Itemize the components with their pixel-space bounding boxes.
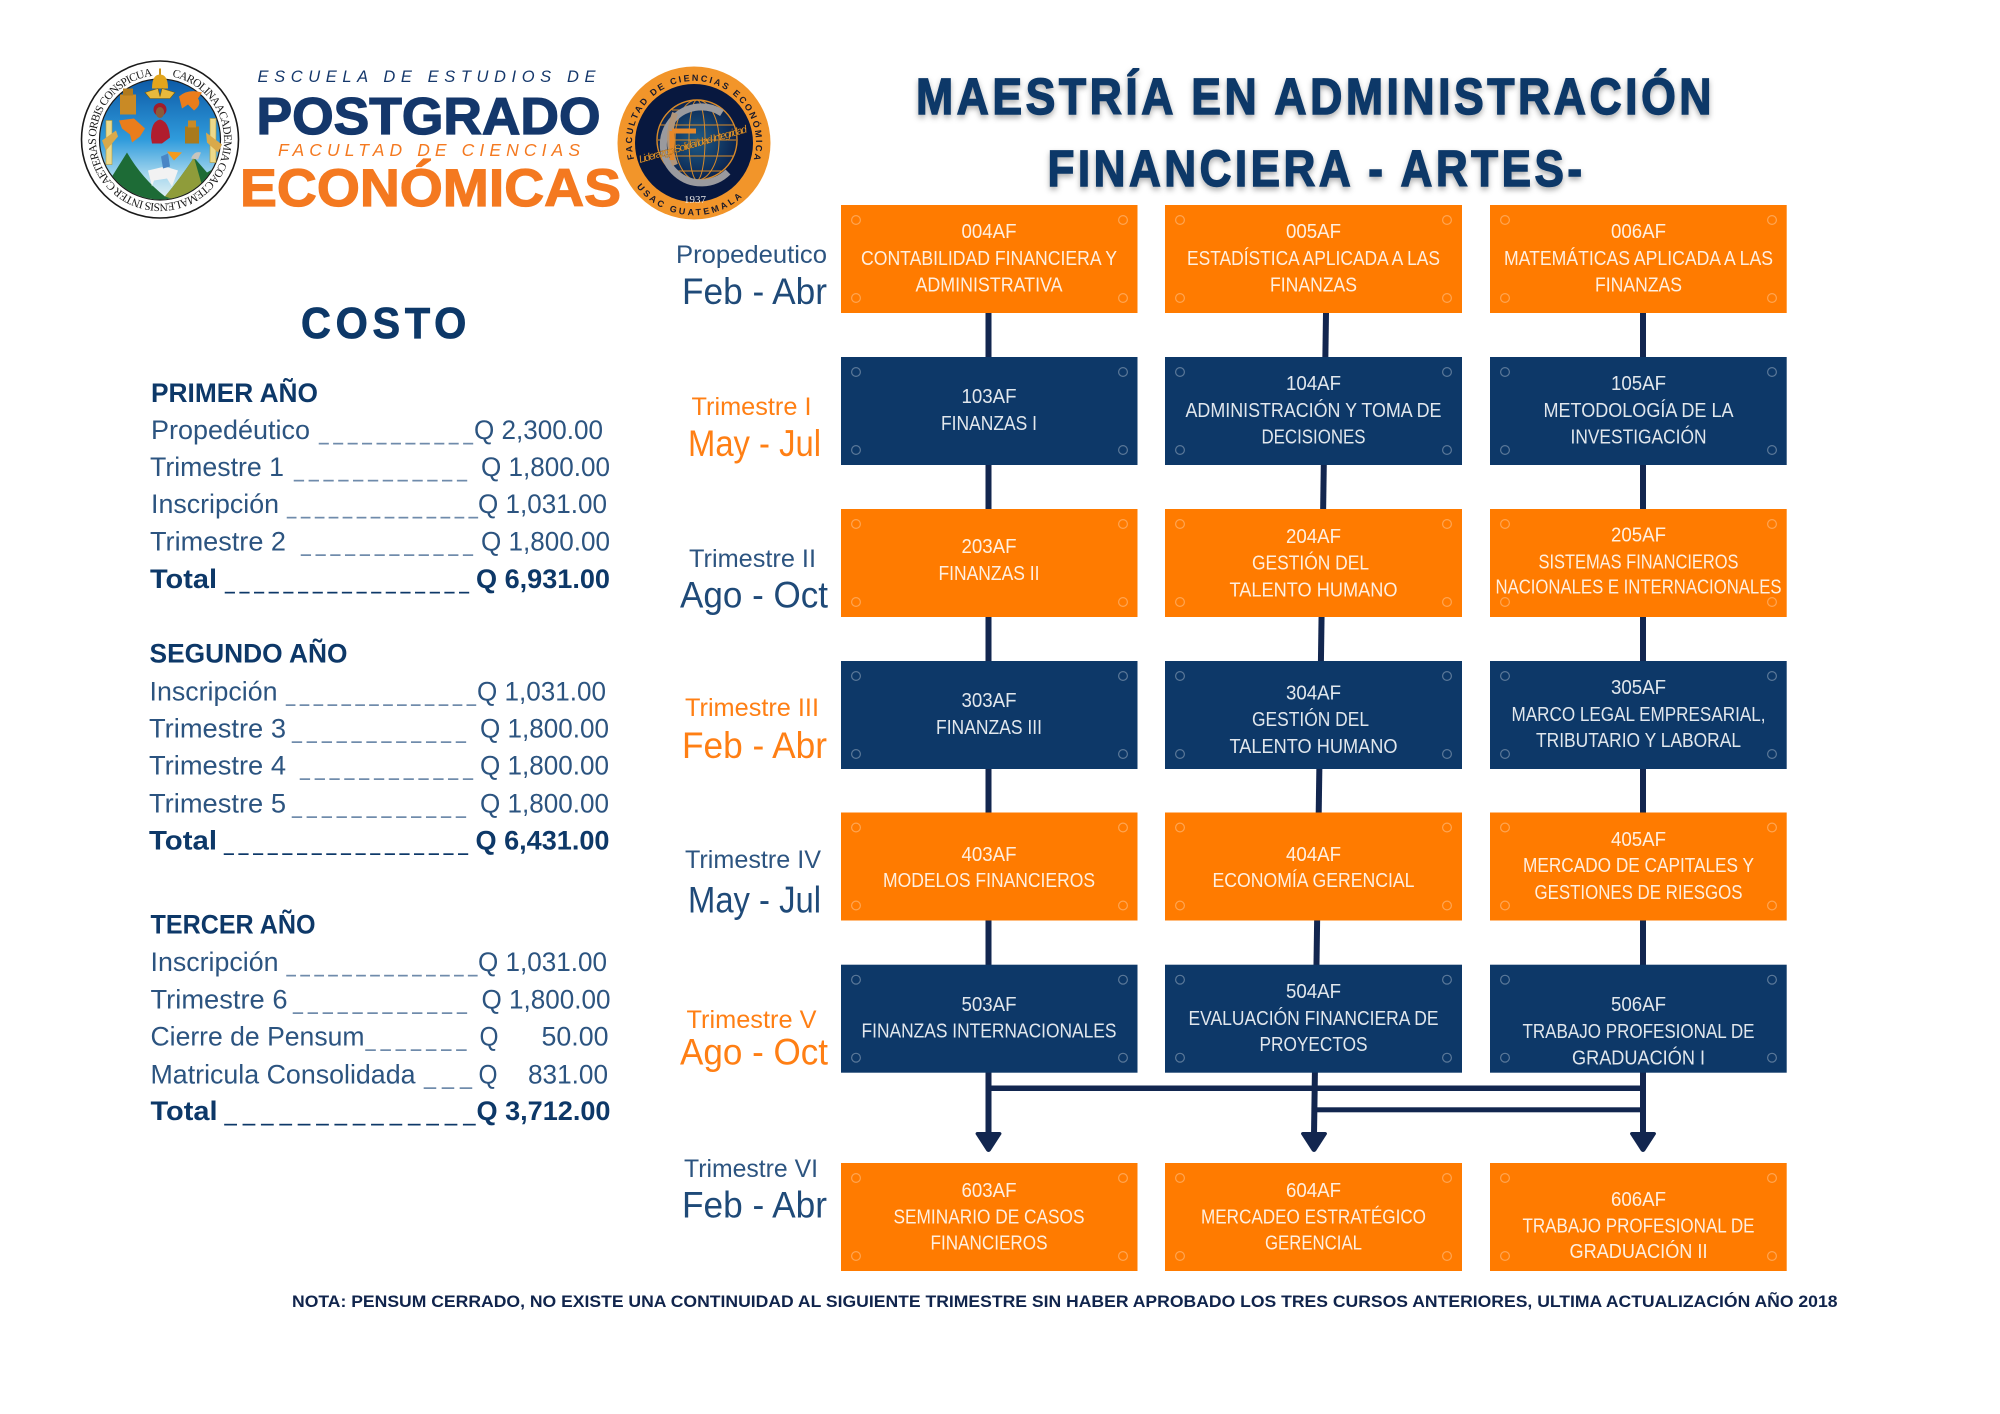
course box: 204AF: 204AF xyxy=(1286,525,1341,548)
cost row: total segundo año: _ _ _ _ _ _ _ _ _ _ _ _ _ _ _ _ _ xyxy=(223,826,469,856)
course box: 105AF: 105AF xyxy=(1611,372,1666,395)
footnote: NOTA: PENSUM CERRADO, NO EXISTE UNA CONTINUIDAD AL SIGUIENTE TRIMESTRE SIN HABER APROBADO LOS TRES CURSOS ANTERIORES, ULTIMA ACTUALIZACIÓN AÑO 2018 xyxy=(292,1291,1837,1311)
course box: 204AF: GESTIÓN DEL xyxy=(1252,552,1369,574)
cost row: trimestre 1: Trimestre 1 xyxy=(150,452,284,482)
arrow: column 1 xyxy=(976,313,1002,1152)
course box: 305AF xyxy=(1490,661,1787,769)
course box: 005AF xyxy=(1165,205,1462,313)
course box: 604AF xyxy=(1165,1163,1462,1271)
cost row: matricula consolidada: Q xyxy=(478,1060,498,1090)
course box: 506AF xyxy=(1490,965,1787,1073)
panel: costo xyxy=(149,299,610,1126)
course box: 606AF: GRADUACIÓN II xyxy=(1570,1240,1708,1263)
panel: tercer año xyxy=(150,908,610,1126)
cost row: inscripción: _ _ _ _ _ _ _ _ _ _ _ _ _ _ xyxy=(285,676,477,706)
cost row: cierre de pensum: Q xyxy=(480,1022,498,1052)
cost row: cierre de pensum: 50.00 xyxy=(542,1022,608,1052)
cost row: trimestre 5 xyxy=(149,788,609,818)
course box: 603AF xyxy=(841,1163,1138,1271)
course box: 604AF: MERCADEO ESTRATÉGICO xyxy=(1201,1206,1426,1228)
course box: 205AF: NACIONALES E INTERNACIONALES xyxy=(1496,576,1782,598)
period label xyxy=(682,694,827,766)
course box: 604AF: 604AF xyxy=(1286,1179,1341,1202)
cost row: inscripción: Inscripción xyxy=(151,489,279,519)
row: trimestre I xyxy=(688,357,1787,465)
period label: Trimestre IV xyxy=(685,846,821,874)
cost row: total tercer año: Q 3,712.00 xyxy=(476,1096,610,1126)
period label: Propedeutico xyxy=(676,241,827,269)
course box: 405AF: GESTIONES DE RIESGOS xyxy=(1534,881,1742,904)
heading: primer año: PRIMER AÑO xyxy=(151,377,318,408)
cost row: total primer año: Total xyxy=(150,564,217,594)
period label: Trimestre II xyxy=(689,545,816,573)
period label: Ago - Oct xyxy=(680,1032,829,1072)
course box: 303AF xyxy=(841,661,1138,769)
cost row: trimestre 1: Q 1,800.00 xyxy=(481,452,610,482)
course box: 304AF xyxy=(1165,661,1462,769)
title: FINANCIERA - ARTES- xyxy=(1048,140,1586,197)
cost row: propedéutico: Propedéutico xyxy=(151,415,310,445)
cost row: trimestre 5: _ _ _ _ _ _ _ _ _ _ _ _ xyxy=(291,788,467,818)
course box: 606AF: 606AF xyxy=(1611,1188,1666,1211)
connector lines and arrows xyxy=(976,313,1656,1152)
cost row: inscripción: Q 1,031.00 xyxy=(477,676,606,706)
cost row: trimestre 5: Trimestre 5 xyxy=(149,788,286,818)
cost row: total tercer año xyxy=(150,1096,610,1126)
cost row: total tercer año: Total xyxy=(150,1096,218,1126)
course box: 305AF: TRIBUTARIO Y LABORAL xyxy=(1536,729,1741,752)
period label: Feb - Abr xyxy=(682,725,827,766)
cost row: matricula consolidada: _ _ _ xyxy=(423,1060,473,1090)
course box: 103AF: 103AF xyxy=(962,385,1016,408)
period label: Trimestre III xyxy=(685,694,819,722)
course box: 104AF xyxy=(1165,357,1462,465)
course box: 104AF: DECISIONES xyxy=(1262,426,1366,448)
cost row: cierre de pensum: _ _ _ _ _ _ _ xyxy=(365,1022,467,1052)
logo: Facultad de Ciencias Económicas seal xyxy=(618,66,770,220)
connector bar: upper xyxy=(988,1086,1643,1091)
period label xyxy=(680,1006,829,1072)
course box: 606AF: TRABAJO PROFESIONAL DE xyxy=(1522,1214,1754,1238)
course box: 403AF: MODELOS FINANCIEROS xyxy=(883,869,1095,892)
cost row: propedéutico: Q 2,300.00 xyxy=(474,415,603,445)
period label: Ago - Oct xyxy=(680,574,829,616)
cost row: inscripción xyxy=(150,676,606,706)
panel: segundo año xyxy=(149,638,610,856)
heading: costo: COSTO xyxy=(301,299,471,348)
wordmark line: facultad de ciencias: FACULTAD DE CIENCIAS xyxy=(278,140,580,160)
course box: 104AF: 104AF xyxy=(1286,372,1341,395)
connector bar: lower xyxy=(1315,1107,1643,1112)
cost row: total primer año: _ _ _ _ _ _ _ _ _ _ _ _ _ _ _ _ _ xyxy=(224,564,470,594)
row: propedeutico xyxy=(676,205,1787,313)
course box: 105AF: INVESTIGACIÓN xyxy=(1570,426,1706,448)
course box: 303AF: 303AF xyxy=(962,689,1016,712)
course box: 506AF: 506AF xyxy=(1611,993,1666,1016)
cost row: trimestre 3: Q 1,800.00 xyxy=(480,714,609,744)
cost row: total segundo año: Q 6,431.00 xyxy=(476,826,610,856)
period label: May - Jul xyxy=(688,880,821,920)
arrow: column 3 xyxy=(1630,313,1656,1152)
cost row: inscripción: _ _ _ _ _ _ _ _ _ _ _ _ _ _ xyxy=(286,947,478,977)
course box: 606AF xyxy=(1490,1163,1787,1271)
cost row: trimestre 4: _ _ _ _ _ _ _ _ _ _ _ _ xyxy=(299,750,474,780)
period label: Trimestre I xyxy=(692,393,812,421)
cost row: inscripción xyxy=(150,947,607,977)
course box: 305AF: 305AF xyxy=(1611,676,1666,699)
course box: 204AF xyxy=(1165,509,1462,617)
cost row: trimestre 1 xyxy=(150,452,610,482)
course box: 006AF: 006AF xyxy=(1611,220,1666,243)
wordmark line: economicas: ECONÓMICAS xyxy=(240,158,621,218)
cost row: matricula consolidada: Matricula Consolidada xyxy=(150,1060,416,1090)
cost row: matricula consolidada: 831.00 xyxy=(528,1060,608,1090)
course box: 504AF: 504AF xyxy=(1286,980,1341,1003)
heading: segundo año: SEGUNDO AÑO xyxy=(150,638,348,668)
course box: 006AF: MATEMÁTICAS APLICADA A LAS xyxy=(1504,247,1773,270)
course box: 205AF: SISTEMAS FINANCIEROS xyxy=(1538,550,1738,574)
course box: 304AF: TALENTO HUMANO xyxy=(1230,735,1398,758)
course box: 104AF: ADMINISTRACIÓN Y TOMA DE xyxy=(1186,399,1442,422)
course box: 503AF: 503AF xyxy=(962,993,1016,1016)
course box: 403AF: 403AF xyxy=(962,843,1016,866)
cost row: trimestre 5: Q 1,800.00 xyxy=(480,788,609,818)
period label xyxy=(685,846,821,920)
cost row: trimestre 6 xyxy=(150,984,610,1014)
period label xyxy=(688,393,821,464)
period label xyxy=(676,241,827,312)
course box: 404AF xyxy=(1165,812,1462,920)
course box: 603AF: 603AF xyxy=(962,1179,1016,1202)
course box: 503AF: FINANZAS INTERNACIONALES xyxy=(862,1020,1116,1042)
title: MAESTRÍA EN ADMINISTRACIÓN xyxy=(916,68,1715,125)
period label: Trimestre V xyxy=(686,1006,817,1034)
period label: May - Jul xyxy=(688,423,821,464)
cost row: trimestre 2: Q 1,800.00 xyxy=(481,526,610,556)
cost row: trimestre 3: Trimestre 3 xyxy=(149,714,286,744)
course box: 403AF xyxy=(841,812,1138,920)
course box: 105AF xyxy=(1490,357,1787,465)
course box: 005AF: FINANZAS xyxy=(1270,274,1357,296)
cost row: trimestre 6: Q 1,800.00 xyxy=(482,984,610,1014)
course box: 604AF: GERENCIAL xyxy=(1265,1232,1362,1254)
course box: 404AF: ECONOMÍA GERENCIAL xyxy=(1212,869,1414,892)
course box: 105AF: METODOLOGÍA DE LA xyxy=(1544,399,1734,422)
period label: Feb - Abr xyxy=(682,271,827,312)
course box: 004AF: CONTABILIDAD FINANCIERA Y xyxy=(861,247,1117,270)
row: trimestre IV xyxy=(685,812,1787,920)
period label xyxy=(680,545,829,616)
cost row: matricula consolidada xyxy=(150,1060,608,1090)
course box: 004AF: 004AF xyxy=(962,220,1016,243)
course box: 504AF: EVALUACIÓN FINANCIERA DE xyxy=(1188,1007,1438,1030)
wordmark line: escuela de estudios de: ESCUELA DE ESTUDIOS DE xyxy=(258,68,596,86)
row: trimestre III xyxy=(682,661,1787,769)
cost row: inscripción: Q 1,031.00 xyxy=(478,947,607,977)
course box: 304AF: 304AF xyxy=(1286,682,1341,704)
course box: 405AF xyxy=(1490,812,1787,920)
course box: 405AF: MERCADO DE CAPITALES Y xyxy=(1523,854,1754,877)
course box: 305AF: MARCO LEGAL EMPRESARIAL, xyxy=(1512,703,1766,726)
course box: 103AF: FINANZAS I xyxy=(941,412,1037,435)
cost row: inscripción: _ _ _ _ _ _ _ _ _ _ _ _ _ _ xyxy=(286,489,479,519)
panel: primer año xyxy=(150,377,610,594)
course box: 205AF xyxy=(1490,509,1787,617)
row: trimestre V xyxy=(680,965,1787,1073)
course box: 304AF: GESTIÓN DEL xyxy=(1252,708,1369,731)
arrow: column 2 xyxy=(1301,313,1329,1152)
course box: 004AF: ADMINISTRATIVA xyxy=(916,274,1063,296)
course box: 203AF: 203AF xyxy=(962,535,1016,558)
cost row: trimestre 4: Q 1,800.00 xyxy=(480,750,609,780)
cost row: trimestre 2: Trimestre 2 xyxy=(150,526,286,556)
course box: 504AF xyxy=(1165,965,1462,1073)
course box: 405AF: 405AF xyxy=(1611,828,1666,851)
row: trimestre VI xyxy=(682,1155,1787,1271)
period label: Trimestre VI xyxy=(684,1155,818,1183)
course box: 303AF: FINANZAS III xyxy=(936,716,1042,739)
course box: 203AF xyxy=(841,509,1138,617)
course box: 204AF: TALENTO HUMANO xyxy=(1230,578,1398,602)
cost row: trimestre 4 xyxy=(149,750,609,780)
logo: Facultad de Ciencias Económicas seal: 1937 xyxy=(684,194,706,206)
course box: 205AF: 205AF xyxy=(1611,524,1666,546)
course box: 004AF xyxy=(841,205,1138,313)
period label xyxy=(682,1155,827,1226)
period label: Feb - Abr xyxy=(682,1184,827,1226)
cost row: total segundo año: Total xyxy=(149,826,217,856)
course box: 506AF: GRADUACIÓN I xyxy=(1572,1046,1705,1070)
cost row: trimestre 2: _ _ _ _ _ _ _ _ _ _ _ _ xyxy=(300,526,474,556)
cost row: inscripción xyxy=(151,489,607,519)
logo: Facultad de Ciencias Económicas seal: USAC GUATEMALA xyxy=(638,183,742,216)
course box: 506AF: TRABAJO PROFESIONAL DE xyxy=(1522,1020,1754,1043)
course box: 503AF xyxy=(841,965,1138,1073)
cost row: propedéutico: _ _ _ _ _ _ _ _ _ _ _ xyxy=(318,415,474,445)
course box: 603AF: FINANCIEROS xyxy=(930,1232,1048,1254)
course box: 103AF xyxy=(841,357,1138,465)
cost row: inscripción: Inscripción xyxy=(150,947,278,977)
cost row: total tercer año: _ _ _ _ _ _ _ _ _ _ _ _ _ _ xyxy=(224,1096,476,1126)
cost row: trimestre 4: Trimestre 4 xyxy=(149,750,286,780)
cost row: cierre de pensum: Cierre de Pensum xyxy=(150,1022,364,1052)
cost row: trimestre 2 xyxy=(150,526,610,556)
cost row: trimestre 6: _ _ _ _ _ _ _ _ _ _ _ _ xyxy=(292,984,468,1014)
wordmark line: postgrado: POSTGRADO xyxy=(256,88,600,146)
course box: 203AF: FINANZAS II xyxy=(938,562,1040,585)
row: trimestre II xyxy=(680,509,1787,617)
course box: 005AF: 005AF xyxy=(1286,220,1341,243)
course box: 603AF: SEMINARIO DE CASOS xyxy=(894,1206,1084,1228)
course box: 006AF: FINANZAS xyxy=(1595,274,1682,296)
cost row: trimestre 3: _ _ _ _ _ _ _ _ _ _ _ _ xyxy=(291,714,467,744)
course box: 404AF: 404AF xyxy=(1286,843,1341,866)
course box: 006AF xyxy=(1490,205,1787,313)
cost row: propedéutico xyxy=(151,415,603,445)
logo: Facultad de Ciencias Económicas seal: Liderazgo Solidaridad Integridad xyxy=(638,123,750,166)
cost row: inscripción: Inscripción xyxy=(150,676,278,706)
heading: tercer año: TERCER AÑO xyxy=(150,908,316,940)
cost row: trimestre 3 xyxy=(149,714,609,744)
course box: 005AF: ESTADÍSTICA APLICADA A LAS xyxy=(1187,247,1440,270)
cost row: trimestre 6: Trimestre 6 xyxy=(150,984,288,1014)
title xyxy=(916,68,1715,197)
cost row: cierre de pensum xyxy=(150,1022,608,1052)
cost row: total primer año: Q 6,931.00 xyxy=(476,564,610,594)
cost row: inscripción: Q 1,031.00 xyxy=(478,489,607,519)
logo: Escuela de Estudios de Postgrado wordmark xyxy=(240,68,621,218)
cost row: trimestre 1: _ _ _ _ _ _ _ _ _ _ _ _ xyxy=(293,452,468,482)
course box: 504AF: PROYECTOS xyxy=(1260,1033,1368,1056)
logo: Universidad de San Carlos seal: CAROLINA ACADEMIA COACTEMALENSIS INTER CAETERAS ORBIS CONSPICUA xyxy=(88,69,232,212)
